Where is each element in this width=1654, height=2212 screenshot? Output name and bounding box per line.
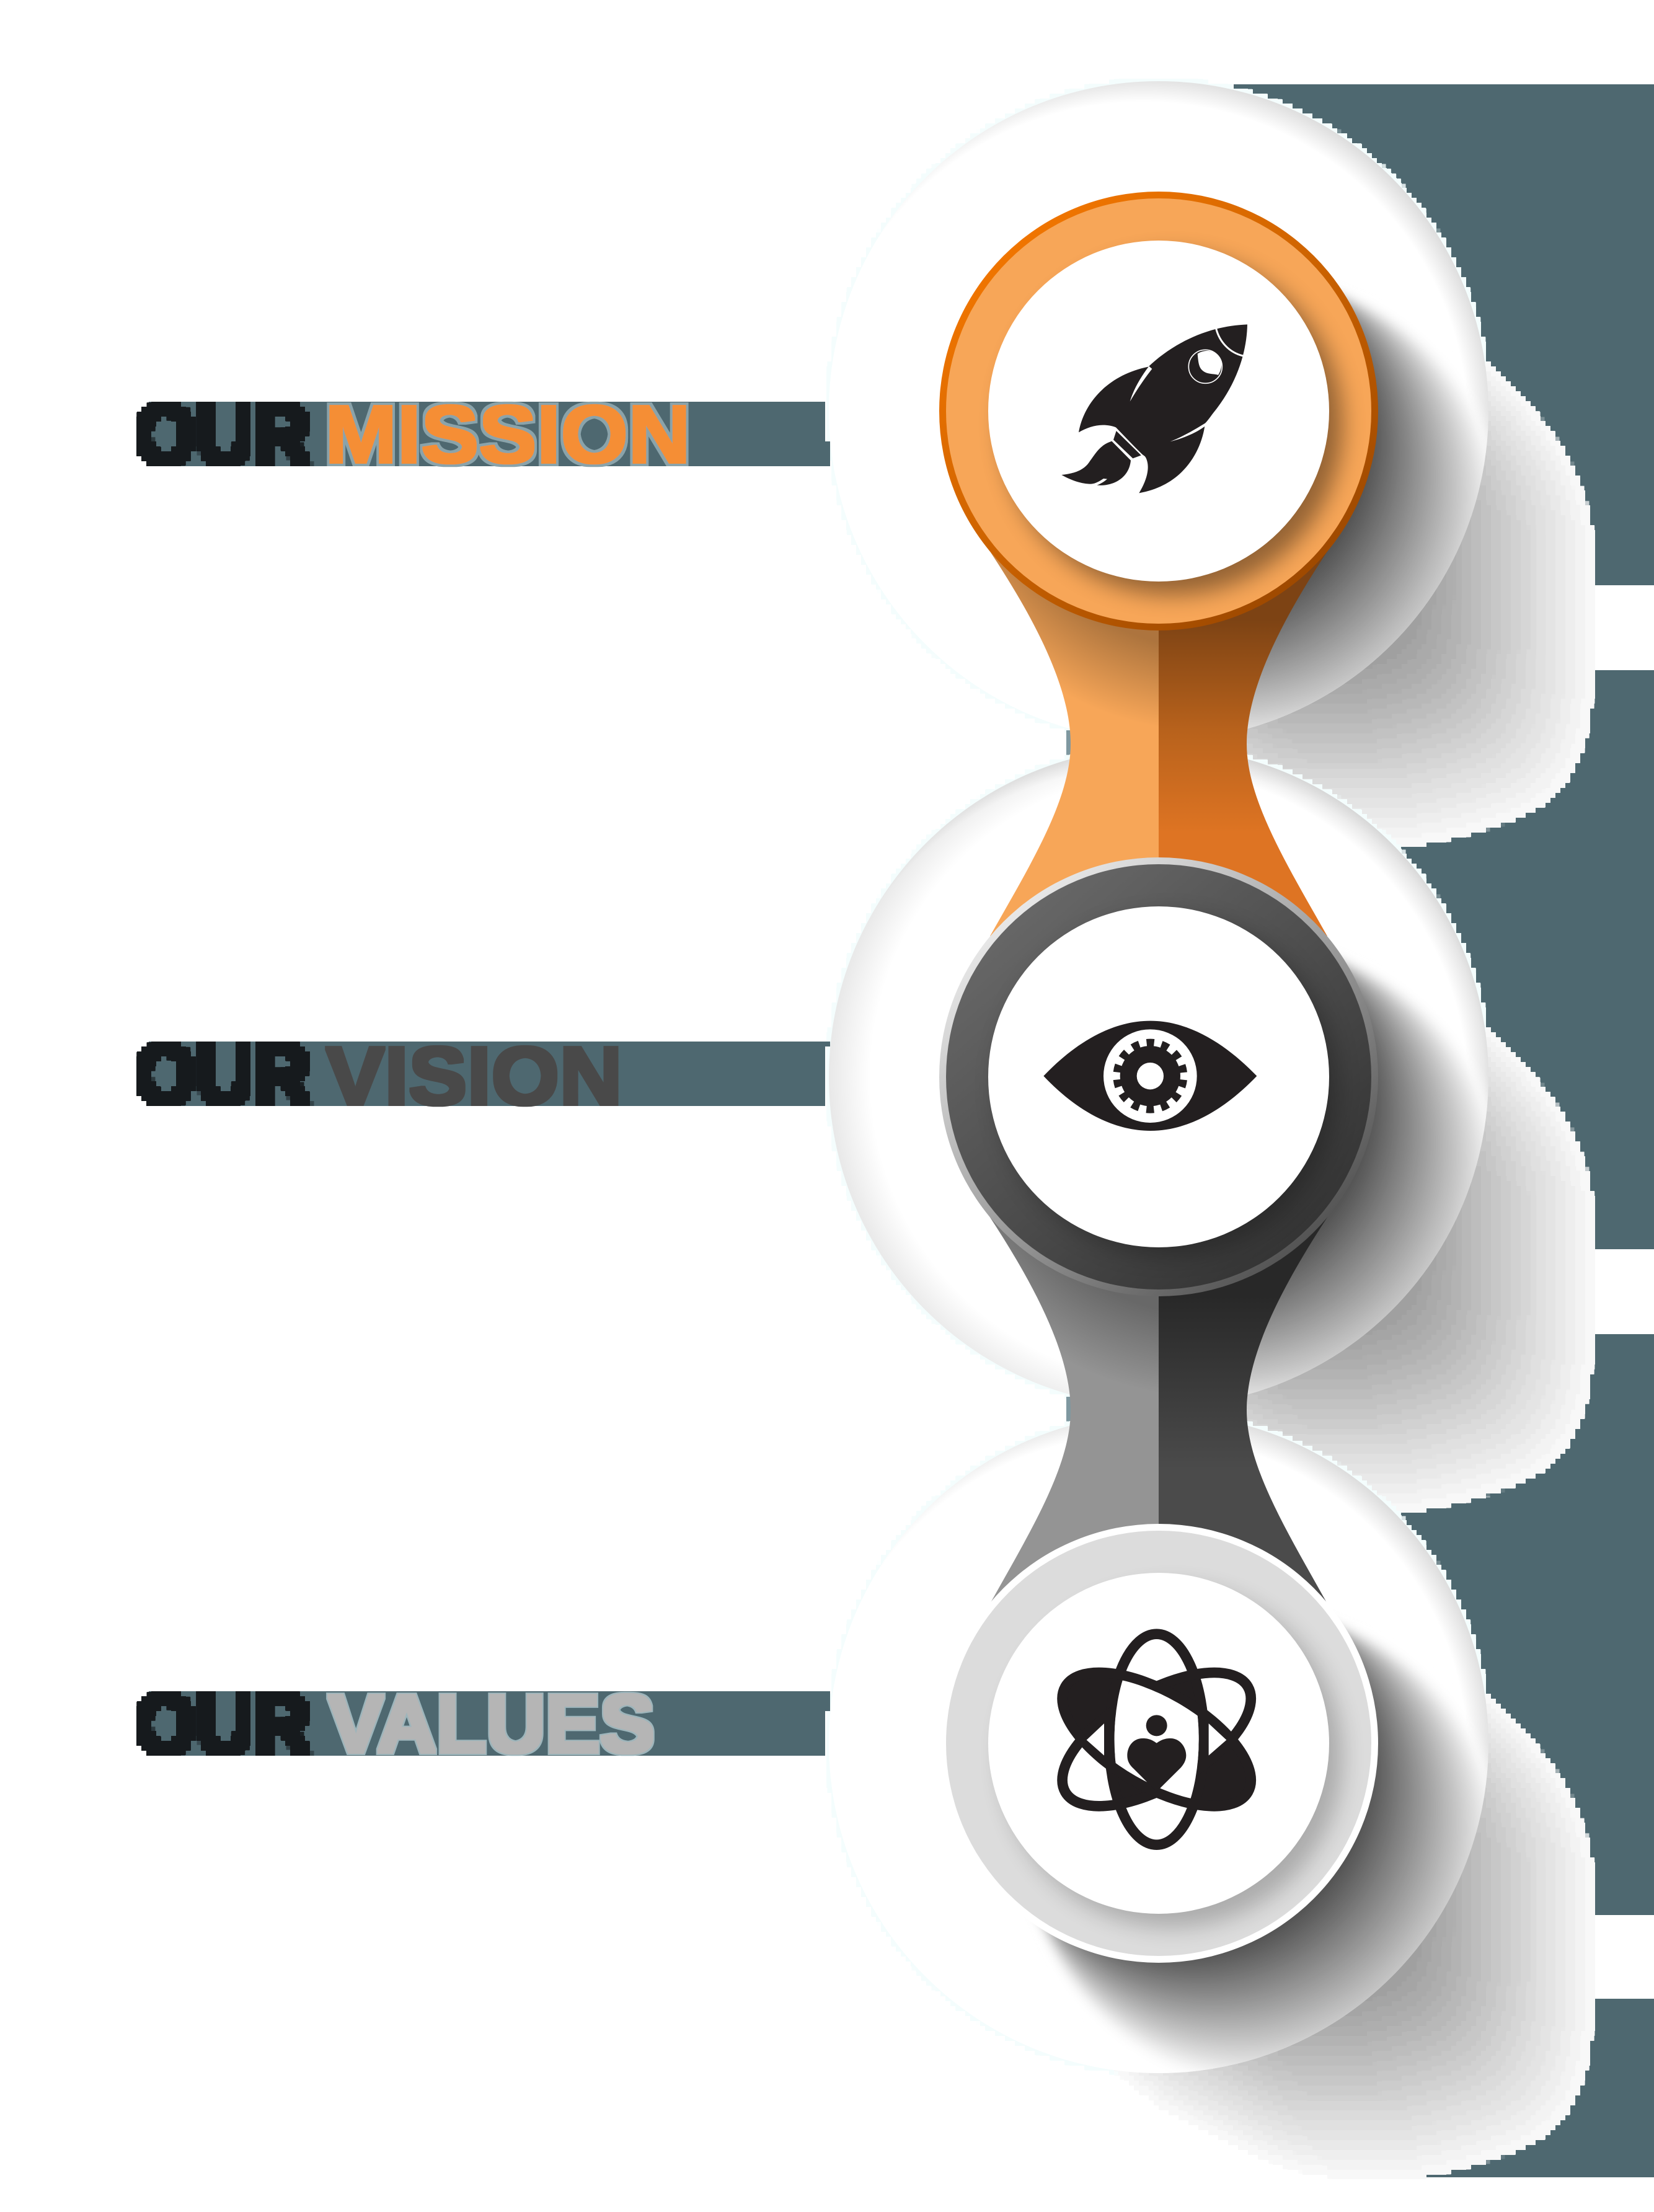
- label band: mission: [149, 402, 830, 466]
- halo and long shadow: mission: [826, 78, 1594, 845]
- small gap patch between halos two and three: [1066, 1397, 1071, 1423]
- heading: our vision: VISION: [326, 1030, 622, 1121]
- orange connector between mission and vision: [989, 496, 1328, 992]
- heading: our values: [135, 1677, 655, 1771]
- heading: our values: VALUES: [329, 1678, 655, 1769]
- background band: third right: [1389, 1334, 1654, 1915]
- background band: second right: [1389, 670, 1654, 1249]
- small gap patch between halos one and two: [1066, 730, 1071, 758]
- heading: our vision: OUR: [135, 1027, 311, 1121]
- button: values: [939, 1524, 1378, 1963]
- label band: values: [149, 1691, 830, 1756]
- heading: our mission: MISSION: [325, 389, 691, 480]
- icon: rocket with paintbrush flame: [1061, 324, 1247, 493]
- halo and long shadow: values: [826, 1410, 1594, 2177]
- button: vision: [939, 857, 1378, 1296]
- icon: eye with gear iris: [1043, 1021, 1257, 1131]
- halo and long shadow: vision: [826, 744, 1594, 1511]
- background band: bottom right: [1395, 1999, 1654, 2177]
- heading: our mission: [135, 387, 691, 482]
- icon: atom with person and heart: [1041, 1634, 1271, 1845]
- heading: our vision: [135, 1027, 622, 1121]
- button: mission: [939, 192, 1378, 630]
- label band: vision: [149, 1042, 830, 1106]
- heading: our mission: OUR: [135, 387, 311, 482]
- background band: top right: [1234, 84, 1654, 585]
- grey connector between vision and values: [989, 1162, 1328, 1661]
- heading: our values: OUR: [135, 1677, 311, 1771]
